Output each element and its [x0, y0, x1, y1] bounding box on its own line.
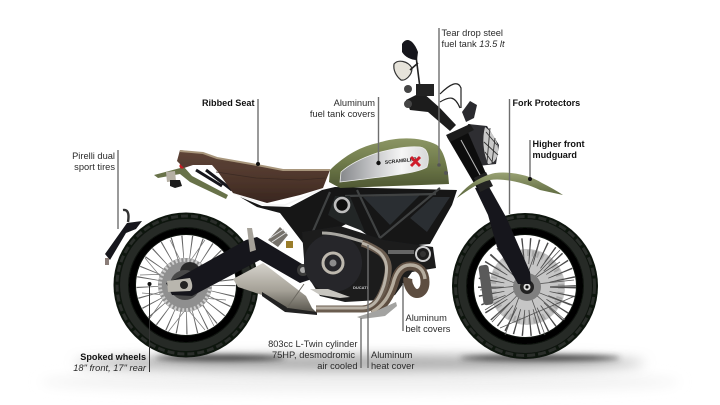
- callout: fork protectors: Fork Protectors: [512, 98, 580, 108]
- muffler: [233, 263, 317, 315]
- callout: aluminum belt covers: belt covers: [406, 324, 451, 334]
- callout: aluminum heat cover: [368, 245, 414, 371]
- callout: tear drop steel fuel tank: fuel tank 13.5 lt: [442, 39, 505, 49]
- callout: fork protectors: [510, 98, 580, 214]
- exhaust pipes: [316, 243, 425, 313]
- front mudguard: [457, 172, 563, 198]
- frame and subframe: [233, 187, 457, 248]
- callout: pirelli dual sport tires: Pirelli dual: [72, 151, 115, 161]
- license plate bracket: [105, 210, 142, 265]
- callout: aluminum belt covers: [403, 283, 451, 334]
- swingarm: [166, 228, 315, 296]
- ground shadow: [40, 355, 680, 392]
- callout: tear drop steel fuel tank: Tear drop steel: [442, 28, 503, 38]
- callout: higher front mudguard: Higher front: [532, 139, 585, 149]
- callout: spoked wheels: [73, 282, 152, 373]
- callout: spoked wheels: Spoked wheels: [80, 352, 146, 362]
- callout: aluminum fuel tank covers: fuel tank covers: [310, 109, 375, 119]
- callout: spoked wheels: 18" front, 17" rear: [73, 363, 147, 373]
- callout: higher front mudguard: mudguard: [532, 150, 577, 160]
- callout: engine: [268, 318, 361, 371]
- callout: aluminum fuel tank covers: Aluminum: [334, 98, 375, 108]
- callout: engine: air cooled: [317, 361, 358, 371]
- heat cover: [357, 302, 397, 319]
- callout: higher front mudguard: [528, 139, 585, 181]
- motorcycle: [105, 40, 598, 359]
- callout: aluminum heat cover: heat cover: [371, 361, 414, 371]
- seat: [177, 150, 330, 203]
- callout: tear drop steel fuel tank: [437, 28, 505, 167]
- callout: ribbed seat: [202, 98, 260, 166]
- fuel tank: [329, 138, 449, 188]
- callout: pirelli dual sport tires: [72, 150, 118, 229]
- headlight: [466, 124, 499, 166]
- front wheel: [452, 213, 598, 359]
- fuel tank: SCRAMBLER: [385, 157, 417, 166]
- engine: [302, 226, 436, 302]
- callout: ribbed seat: Ribbed Seat: [202, 98, 254, 108]
- engine: DUCATI: [353, 285, 368, 290]
- rear wheel: [114, 212, 258, 358]
- callout: engine: 75HP, desmodromic: [272, 350, 355, 360]
- callout: aluminum belt covers: Aluminum: [406, 313, 447, 323]
- callout: aluminum fuel tank covers: [310, 97, 381, 165]
- callout: aluminum heat cover: Aluminum: [371, 350, 413, 360]
- callout: pirelli dual sport tires: sport tires: [74, 162, 115, 172]
- rear shock: [268, 227, 293, 248]
- handlebars and mirrors: [394, 40, 477, 131]
- callout: engine: 803cc L-Twin cylinder: [268, 339, 358, 349]
- tail and rear fender: [154, 163, 232, 199]
- front fork: [446, 124, 531, 284]
